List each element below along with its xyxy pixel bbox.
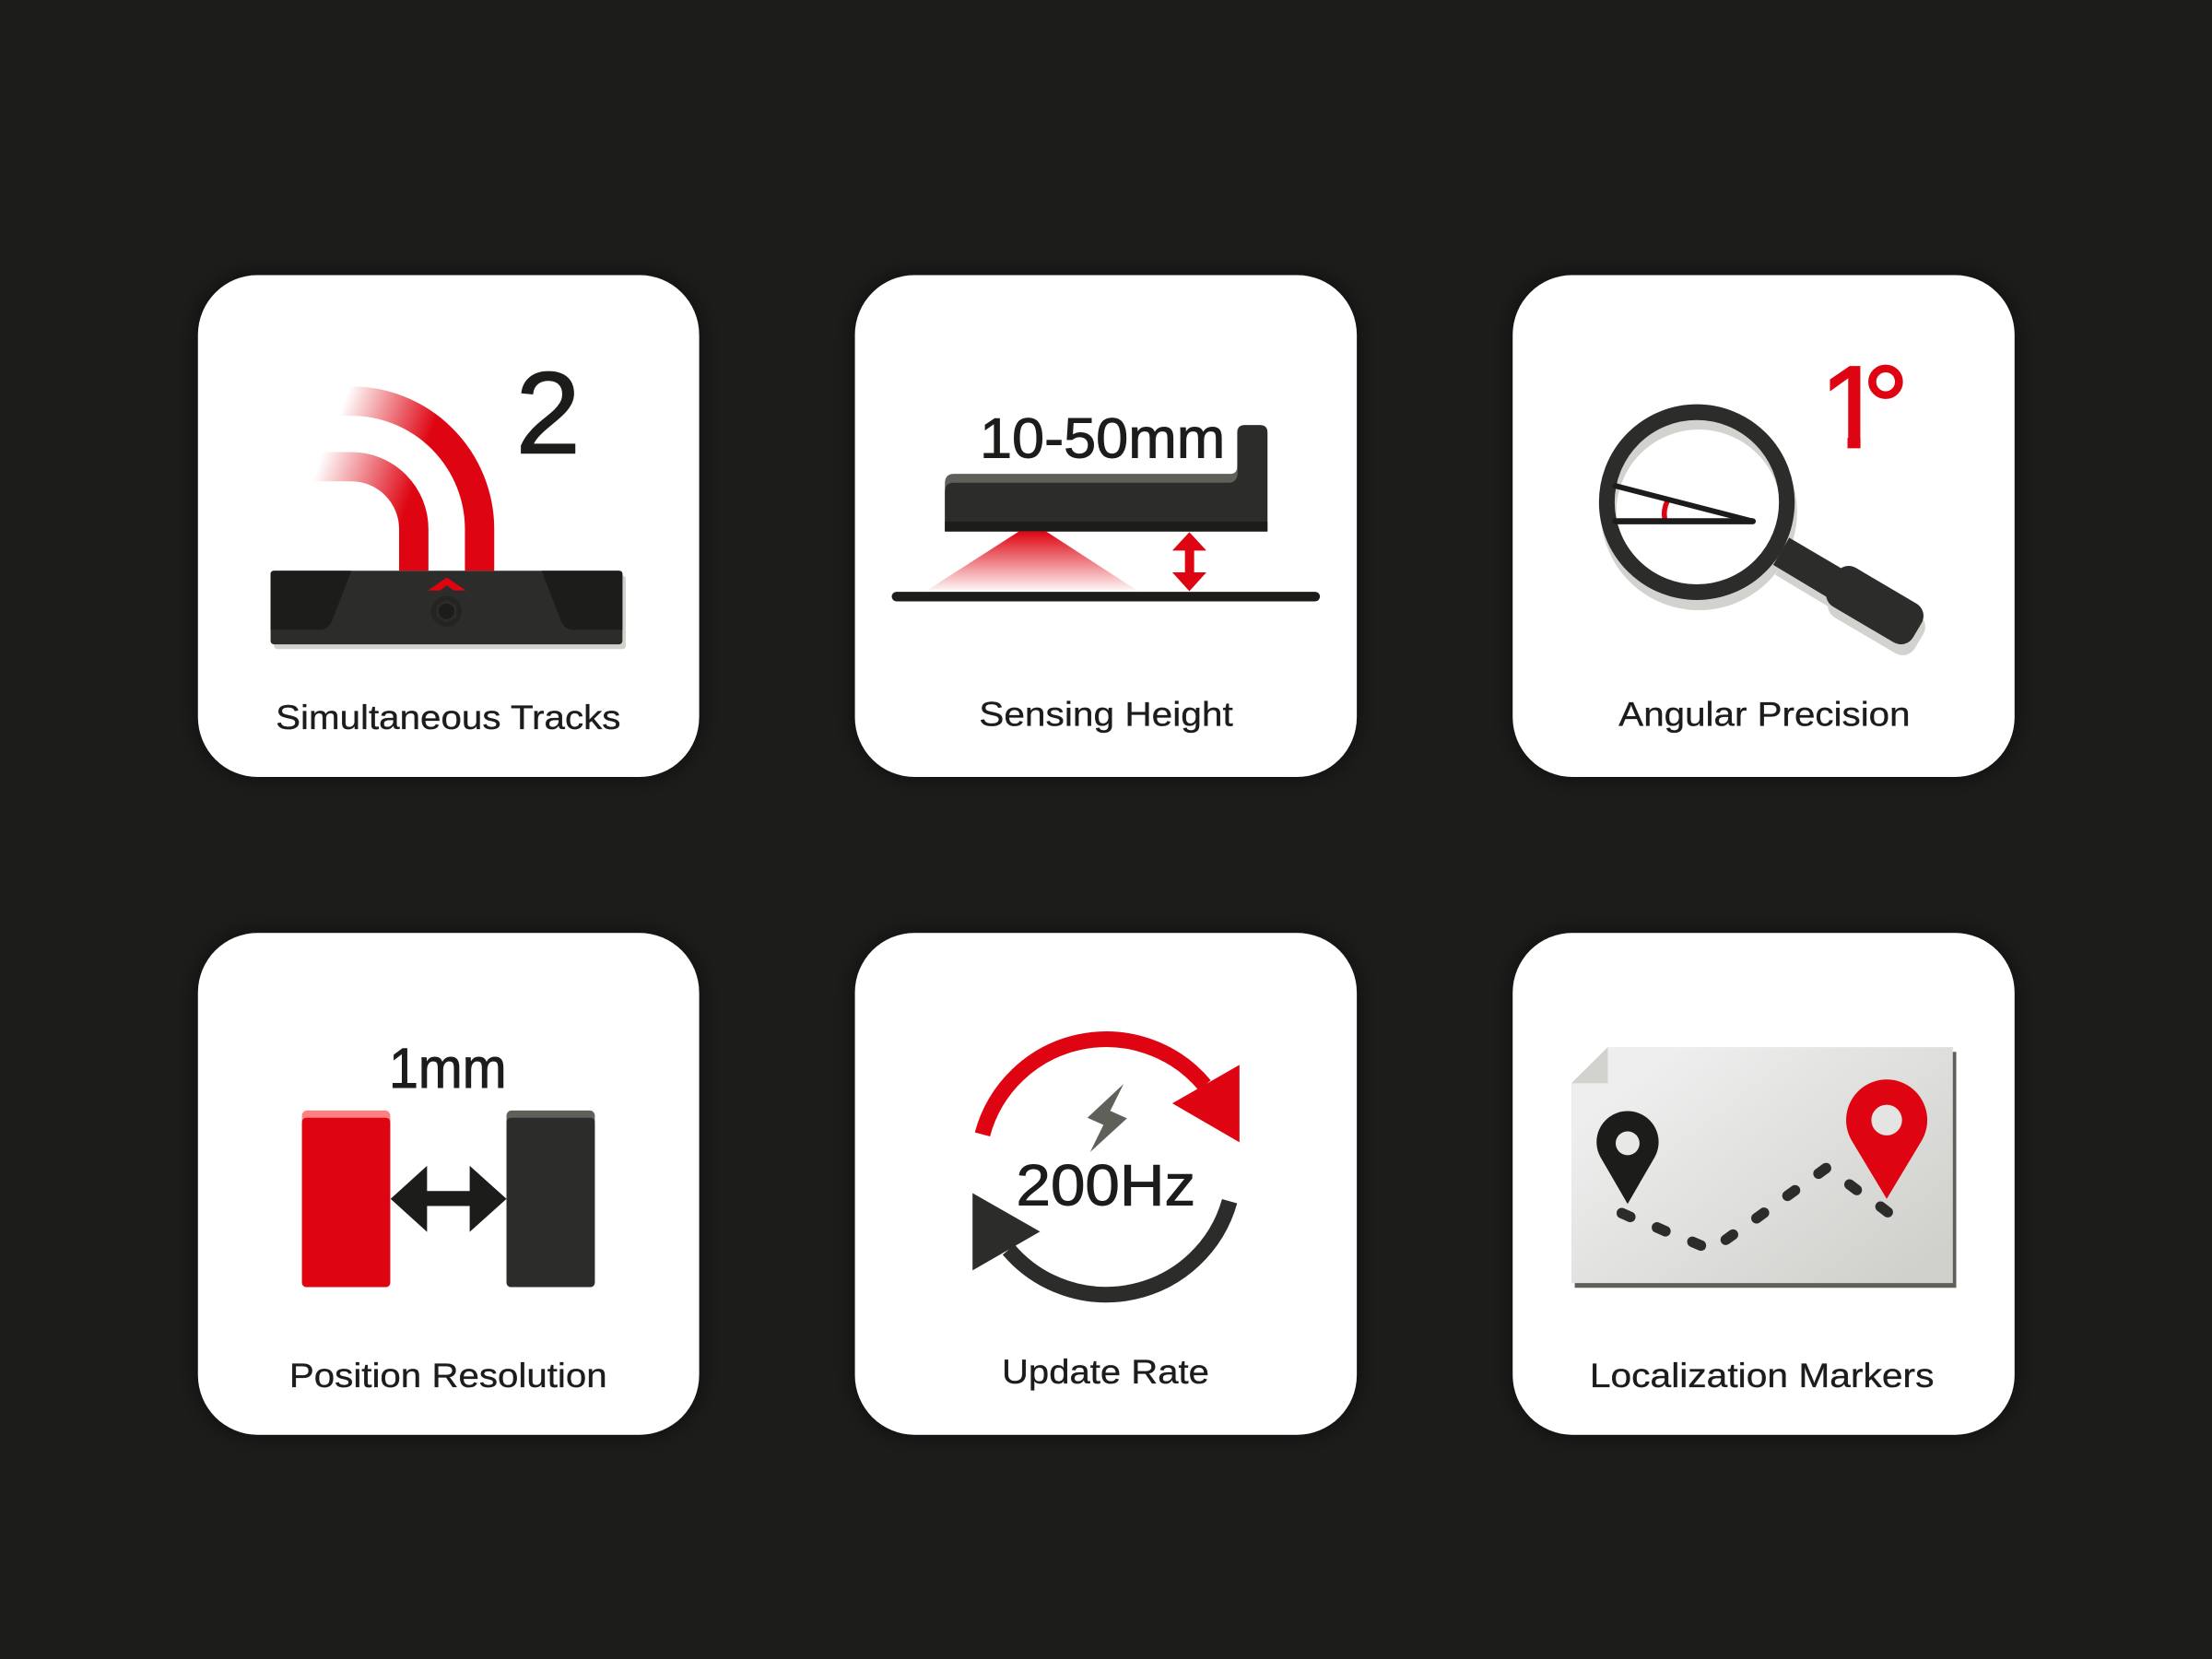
- arrow: height: [1172, 532, 1206, 591]
- arrow: gap: [391, 1166, 507, 1232]
- card: [855, 933, 1357, 1435]
- arrow: dark cycle: [972, 1193, 1230, 1295]
- panel: Update Rate: [855, 933, 1357, 1435]
- icon: dark block: [507, 1111, 594, 1288]
- icon: lightning bolt: [1088, 1084, 1127, 1152]
- icon: track arcs: [309, 401, 479, 571]
- value: 10-50mm: 10-50mm: [980, 406, 1225, 469]
- arrow: red cycle: [982, 1040, 1240, 1142]
- value: 1 degree: °: [1862, 342, 1909, 474]
- label: Update Rate: [1002, 1353, 1209, 1391]
- card: [198, 933, 700, 1435]
- panel: Localization Markers: [1512, 933, 2015, 1435]
- icon: ground line: [892, 592, 1320, 601]
- card: [198, 275, 700, 777]
- icon: sensor bar: [271, 571, 626, 649]
- card: [1512, 275, 2015, 777]
- icon: sensor side view: [945, 425, 1267, 532]
- value: 2: 2: [516, 347, 581, 478]
- label: Sensing Height: [979, 696, 1233, 734]
- panel: Simultaneous Tracks: [198, 275, 700, 777]
- card: [855, 275, 1357, 777]
- card: [1512, 933, 2015, 1435]
- icon: route: [1622, 1168, 1888, 1245]
- value: 1mm: 1mm: [389, 1037, 507, 1100]
- panel: Sensing Height: [855, 275, 1357, 777]
- label: Angular Precision: [1618, 696, 1911, 734]
- icon: sensing beam: [927, 532, 1137, 591]
- icon: red pin: [1846, 1079, 1927, 1199]
- label: Position Resolution: [289, 1357, 607, 1394]
- icon: magnifier: [1606, 412, 1931, 661]
- panel: Position Resolution: [198, 933, 700, 1435]
- icon: black pin: [1596, 1111, 1659, 1204]
- value: 1 degree: 1: [1819, 342, 1885, 474]
- icon: map sheet: [1571, 1047, 1957, 1288]
- value: 200Hz: 200Hz: [1017, 1153, 1195, 1218]
- panel: Angular Precision: [1512, 275, 2015, 777]
- icon: red block: [302, 1111, 390, 1288]
- label: Simultaneous Tracks: [276, 699, 620, 736]
- label: Localization Markers: [1590, 1357, 1934, 1394]
